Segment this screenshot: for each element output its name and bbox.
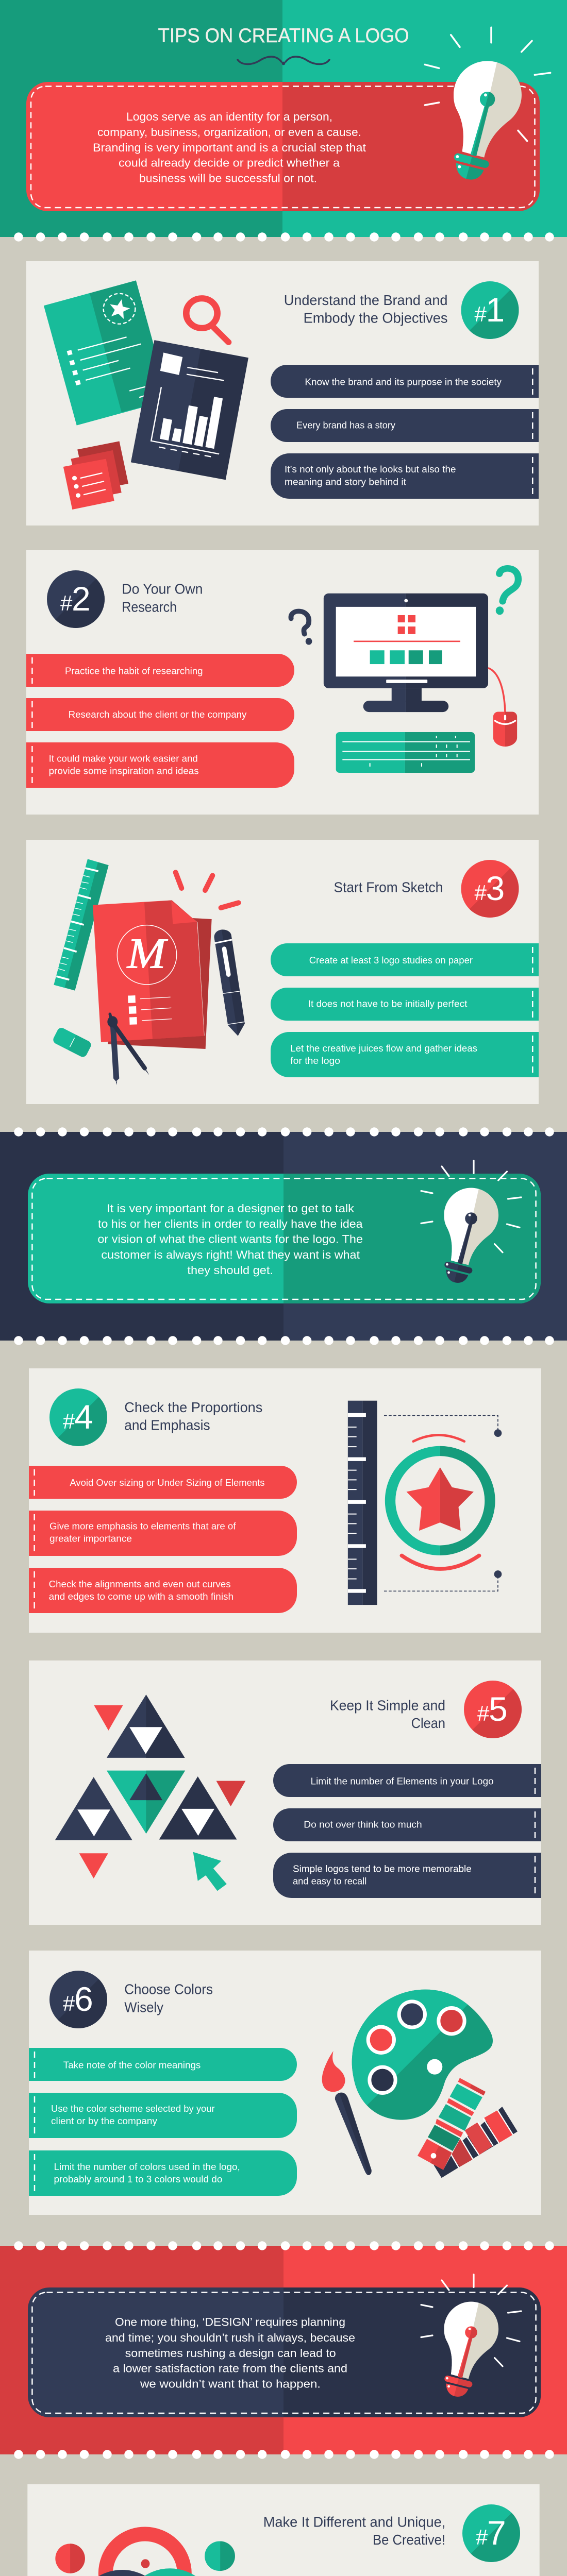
heading: Choose Colors bbox=[124, 1981, 213, 1997]
bar list: and easy to recall bbox=[293, 1876, 366, 1887]
bar list: Limit the number of Elements in your Logo bbox=[311, 1776, 494, 1786]
bar list: Every brand has a story bbox=[296, 420, 395, 431]
illustration: sketch tools: M bbox=[127, 930, 169, 977]
heading: Embody the Objectives bbox=[304, 310, 447, 326]
heading: Make It Different and Unique, bbox=[263, 2514, 445, 2530]
number badge: 1 bbox=[486, 291, 505, 329]
dotted edge bbox=[14, 2241, 554, 2250]
bar list: provide some inspiration and ideas bbox=[49, 766, 199, 776]
band: design takes planning bbox=[0, 2246, 567, 2454]
number badge: # bbox=[474, 880, 487, 905]
number badge: # bbox=[60, 591, 73, 615]
bar list: meaning and story behind it bbox=[285, 477, 406, 487]
illustration: ruler and star logo bbox=[348, 1401, 502, 1605]
callout text: or vision of what the client wants for the logo. The bbox=[97, 1233, 363, 1246]
bar list: Do not over think too much bbox=[304, 1820, 422, 1830]
callout bbox=[28, 2287, 541, 2417]
callout text: they should get. bbox=[187, 1264, 273, 1277]
bar list bbox=[26, 654, 294, 788]
heading bbox=[330, 1697, 445, 1731]
panel: tip 2 bbox=[26, 550, 539, 815]
bar list: Create at least 3 logo studies on paper bbox=[309, 955, 473, 965]
bar list: Avoid Over sizing or Under Sizing of Elements bbox=[70, 1478, 265, 1488]
heading: Be Creative! bbox=[373, 2532, 445, 2548]
heading: Check the Proportions bbox=[124, 1399, 262, 1415]
intro text bbox=[93, 110, 366, 184]
illustration: palette, brush and swatches bbox=[322, 1990, 518, 2178]
dotted edge bbox=[14, 1336, 554, 1345]
callout text: to his or her clients in order to really have the idea bbox=[98, 1217, 363, 1230]
bar list: and edges to come up with a smooth finish bbox=[49, 1591, 234, 1602]
number badge bbox=[461, 860, 519, 918]
number badge: # bbox=[476, 2525, 488, 2549]
heading bbox=[124, 1399, 262, 1433]
heading: Understand the Brand and bbox=[284, 292, 447, 308]
bar list: Check the alignments and even out curves bbox=[49, 1579, 231, 1589]
bar list: Research about the client or the company bbox=[69, 709, 246, 720]
bar list bbox=[271, 943, 539, 1077]
bar list: It could make your work easier and bbox=[49, 753, 198, 764]
heading: and Emphasis bbox=[124, 1417, 210, 1433]
dotted edge bbox=[14, 232, 554, 242]
bar list: Limit the number of colors used in the logo, bbox=[54, 2162, 240, 2172]
number badge: # bbox=[474, 302, 487, 326]
bar list: Take note of the color meanings bbox=[63, 2060, 201, 2070]
intro text: company, business, organization, or even a cause. bbox=[97, 126, 361, 139]
number badge: # bbox=[477, 1701, 490, 1725]
illustration: triangles and cursor bbox=[55, 1694, 245, 1891]
number badge bbox=[462, 2504, 520, 2562]
bar list: Know the brand and its purpose in the society bbox=[305, 377, 502, 387]
heading: Start From Sketch bbox=[334, 879, 443, 895]
callout text: customer is always right! What they want is what bbox=[101, 1248, 360, 1261]
bar list bbox=[273, 1764, 541, 1898]
number badge bbox=[49, 1971, 107, 2028]
panel: tip 3 bbox=[26, 840, 539, 1104]
heading: Clean bbox=[411, 1715, 445, 1731]
bar list: client or by the company bbox=[51, 2116, 157, 2126]
number badge: 2 bbox=[72, 580, 91, 618]
intro text: Logos serve as an identity for a person, bbox=[126, 110, 332, 123]
number badge: 6 bbox=[74, 1980, 93, 2018]
bar list: Give more emphasis to elements that are of bbox=[49, 1521, 236, 1531]
number badge: # bbox=[63, 1991, 75, 2015]
number badge bbox=[49, 1388, 107, 1446]
number badge bbox=[47, 570, 105, 628]
number badge: 4 bbox=[74, 1398, 93, 1436]
bar list bbox=[271, 365, 539, 499]
panel: tip 6 bbox=[29, 1951, 541, 2215]
dotted edge bbox=[14, 1127, 554, 1137]
bar list: Use the color scheme selected by your bbox=[51, 2104, 215, 2114]
illustration: interlocked rings bbox=[55, 2534, 235, 2576]
panel: tip 4 bbox=[29, 1368, 541, 1633]
callout text: One more thing, ‘DESIGN’ requires planning bbox=[115, 2316, 345, 2329]
panel: tip 1 bbox=[26, 261, 539, 526]
illustration: computer bbox=[291, 568, 518, 773]
heading bbox=[263, 2514, 445, 2548]
icon: light bulb bbox=[421, 1161, 521, 1283]
callout bbox=[28, 1174, 541, 1303]
bar list: greater importance bbox=[49, 1534, 132, 1544]
bar list: It’s not only about the looks but also the bbox=[285, 464, 456, 474]
number badge: 5 bbox=[489, 1690, 508, 1728]
heading: Do Your Own bbox=[122, 581, 203, 597]
heading: Wisely bbox=[124, 1999, 163, 2015]
number badge bbox=[464, 1681, 522, 1738]
number badge: 7 bbox=[487, 2514, 506, 2552]
heading bbox=[284, 292, 447, 326]
illustration: documents and magnifier bbox=[44, 280, 248, 510]
icon: light bulb bbox=[425, 27, 551, 180]
callout text: sometimes rushing a design can lead to bbox=[125, 2347, 336, 2360]
bar list: It does not have to be initially perfect bbox=[308, 999, 467, 1009]
bar list bbox=[29, 2048, 297, 2196]
bar list: Let the creative juices flow and gather ideas bbox=[290, 1043, 477, 1054]
title: TIPS ON CREATING A LOGO bbox=[158, 25, 409, 47]
callout text: a lower satisfaction rate from the clients and bbox=[113, 2362, 347, 2375]
intro text: could already decide or predict whether a bbox=[119, 157, 340, 169]
bar list: Simple logos tend to be more memorable bbox=[293, 1863, 472, 1874]
heading bbox=[124, 1981, 213, 2015]
intro callout bbox=[26, 82, 540, 211]
band: talk to clients bbox=[0, 1132, 567, 1341]
heading: Keep It Simple and bbox=[330, 1697, 445, 1713]
bar list bbox=[29, 1466, 297, 1613]
number badge: 3 bbox=[486, 869, 505, 907]
illustration: sketch tools bbox=[52, 859, 245, 1085]
number badge: # bbox=[63, 1409, 75, 1433]
intro text: Branding is very important and is a crucial step that bbox=[93, 141, 366, 154]
bar list: probably around 1 to 3 colors would do bbox=[54, 2174, 222, 2184]
heading: Research bbox=[122, 599, 177, 615]
header band bbox=[0, 0, 567, 237]
number badge bbox=[461, 281, 519, 339]
callout text bbox=[105, 2316, 355, 2391]
callout text: we wouldn’t want that to happen. bbox=[140, 2378, 321, 2391]
panel: tip 7 bbox=[27, 2484, 540, 2576]
heading bbox=[122, 581, 203, 615]
bar list: for the logo bbox=[290, 1056, 340, 1066]
icon: light bulb bbox=[421, 2275, 521, 2397]
callout text bbox=[97, 1202, 363, 1277]
callout text: It is very important for a designer to get to talk bbox=[107, 1202, 355, 1215]
title flourish bbox=[238, 57, 329, 64]
callout text: and time; you shouldn’t rush it always, because bbox=[105, 2331, 355, 2344]
bar list: Practice the habit of researching bbox=[65, 666, 203, 676]
panel: tip 5 bbox=[29, 1660, 541, 1925]
dotted edge bbox=[14, 2450, 554, 2459]
intro text: business will be successful or not. bbox=[139, 172, 317, 184]
